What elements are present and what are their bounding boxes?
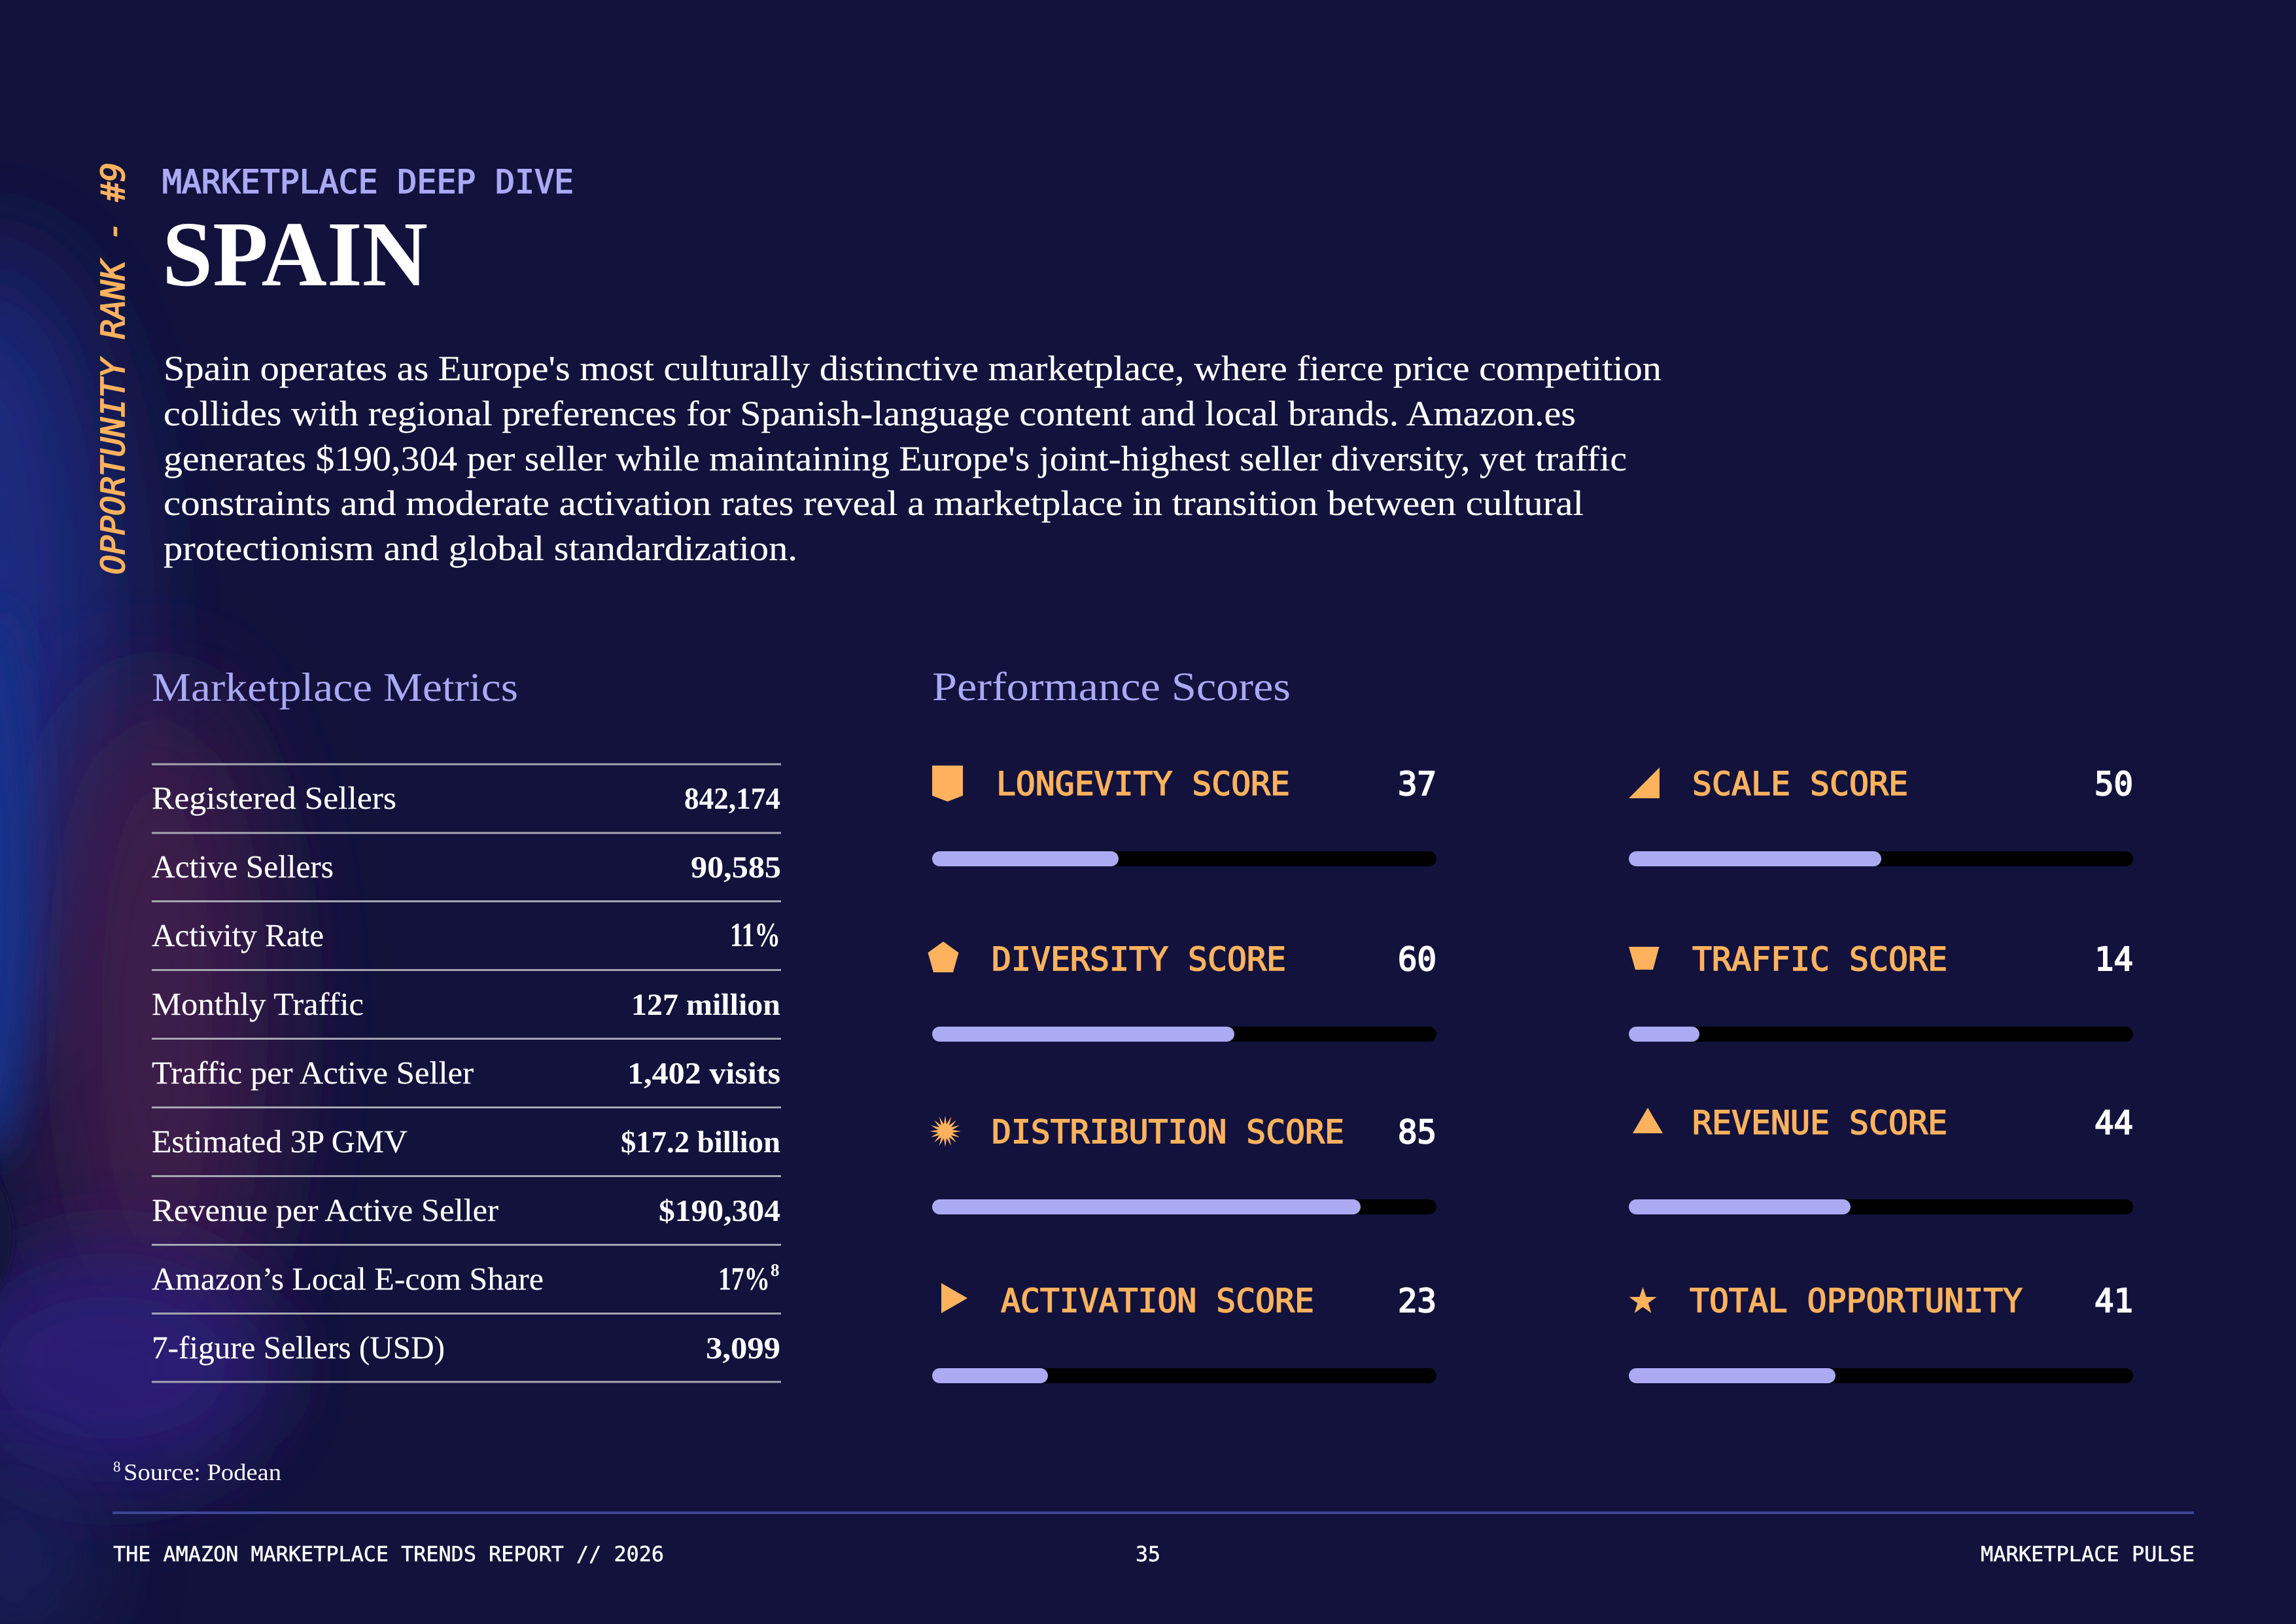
score: longevity: 37 — [1398, 765, 1436, 803]
row: revenue per active seller: Revenue per Active Seller — [152, 1192, 498, 1228]
intro paragraph: Spain operates as Europe's most culturally distinctive marketplace, where fierce price competition — [164, 349, 1661, 388]
row: amazon local share: 17% — [718, 1260, 770, 1297]
icon: star — [1629, 1287, 1656, 1313]
score: distribution — [930, 1113, 1436, 1214]
row: revenue per active seller — [152, 1192, 780, 1228]
intro paragraph — [164, 349, 1661, 568]
score: scale: 50 — [2095, 765, 2133, 803]
row: activity rate — [152, 917, 780, 954]
icon: trapezoid — [1629, 947, 1659, 970]
row: monthly traffic — [152, 986, 780, 1022]
metrics heading: Marketplace Metrics — [152, 665, 518, 710]
vertical rank label: OPPORTUNITY RANK - #9 — [94, 162, 132, 574]
row: traffic per active seller: 1,402 visits — [627, 1057, 780, 1091]
score: revenue: 44 — [2095, 1104, 2133, 1142]
score: activation — [932, 1282, 1436, 1383]
score: diversity: 60 — [1398, 940, 1436, 978]
intro paragraph: protectionism and global standardization. — [164, 529, 797, 568]
score: scale — [1629, 765, 2133, 866]
row: traffic per active seller: Traffic per Active Seller — [152, 1055, 474, 1091]
row: registered sellers: Registered Sellers — [152, 780, 396, 816]
intro paragraph: constraints and moderate activation rates reveal a marketplace in transition between cultural — [164, 484, 1584, 523]
score: total opportunity — [1629, 1282, 2133, 1383]
row: activity rate: Activity Rate — [152, 917, 324, 953]
row: monthly traffic: Monthly Traffic — [152, 986, 364, 1022]
score: distribution: DISTRIBUTION SCORE — [992, 1113, 1344, 1151]
row: monthly traffic: 127 million — [631, 988, 780, 1022]
score: traffic: TRAFFIC SCORE — [1692, 940, 1947, 978]
score: distribution: 85 — [1398, 1113, 1436, 1151]
intro paragraph: collides with regional preferences for Spanish-language content and local brands. Amazon.es — [164, 394, 1576, 433]
eyebrow heading: MARKETPLACE DEEP DIVE — [162, 163, 574, 201]
icon: play triangle — [941, 1283, 967, 1313]
row: estimated gmv: $17.2 billion — [621, 1125, 780, 1159]
score: total opportunity: 41 — [2095, 1282, 2133, 1320]
row: revenue per active seller: $190,304 — [659, 1194, 780, 1228]
row: estimated gmv — [152, 1123, 780, 1159]
score: revenue — [1629, 1104, 2133, 1214]
score: total opportunity: TOTAL OPPORTUNITY — [1690, 1282, 2023, 1320]
row: amazon local share: Amazon’s Local E-com Share — [152, 1261, 544, 1297]
row: registered sellers — [152, 780, 780, 816]
score: longevity: LONGEVITY SCORE — [996, 765, 1290, 803]
row: traffic per active seller — [152, 1055, 780, 1091]
score: diversity — [928, 940, 1436, 1042]
icon: triangle — [1633, 1108, 1663, 1133]
footnote: Source: Podean — [124, 1459, 281, 1485]
score: traffic: 14 — [2095, 940, 2133, 978]
row: active sellers — [152, 849, 781, 885]
score: activation: ACTIVATION SCORE — [1001, 1282, 1314, 1320]
title: SPAIN — [162, 202, 428, 306]
intro paragraph: generates $190,304 per seller while maintaining Europe's joint-highest seller diversity, yet traffic — [164, 439, 1627, 478]
metrics table rules — [152, 763, 781, 1383]
row: seven-figure sellers: 7-figure Sellers (USD) — [152, 1330, 445, 1366]
footnote: 8 — [113, 1458, 120, 1475]
icon: right triangle — [1629, 768, 1660, 798]
footer rule — [113, 1511, 2194, 1514]
score: activation: 23 — [1398, 1282, 1436, 1320]
row: amazon local share: 8 — [771, 1260, 780, 1280]
score: scale: SCALE SCORE — [1692, 765, 1908, 803]
row: amazon local share — [152, 1260, 780, 1297]
score: longevity — [932, 765, 1436, 866]
row: active sellers: 90,585 — [691, 851, 781, 885]
row: seven-figure sellers: 3,099 — [706, 1332, 780, 1366]
row: seven-figure sellers — [152, 1330, 780, 1366]
score: diversity: DIVERSITY SCORE — [992, 940, 1286, 978]
score: traffic — [1629, 940, 2133, 1042]
footer right text: MARKETPLACE PULSE — [1981, 1542, 2195, 1566]
row: registered sellers: 842,174 — [684, 782, 780, 816]
row: estimated gmv: Estimated 3P GMV — [152, 1123, 408, 1159]
page number: 35 — [1136, 1542, 1160, 1566]
icon: pentagon — [928, 942, 959, 972]
performance scores heading: Performance Scores — [932, 665, 1291, 709]
row: activity rate: 11% — [730, 917, 780, 954]
background glow on left edge — [0, 249, 275, 1624]
icon: sunburst — [930, 1116, 961, 1147]
footer left text: THE AMAZON MARKETPLACE TRENDS REPORT // 2026 — [113, 1542, 664, 1566]
icon: pennant square — [932, 766, 963, 802]
score: revenue: REVENUE SCORE — [1692, 1104, 1947, 1142]
row: active sellers: Active Sellers — [152, 849, 334, 885]
panel: marketplace metrics — [152, 665, 781, 1383]
